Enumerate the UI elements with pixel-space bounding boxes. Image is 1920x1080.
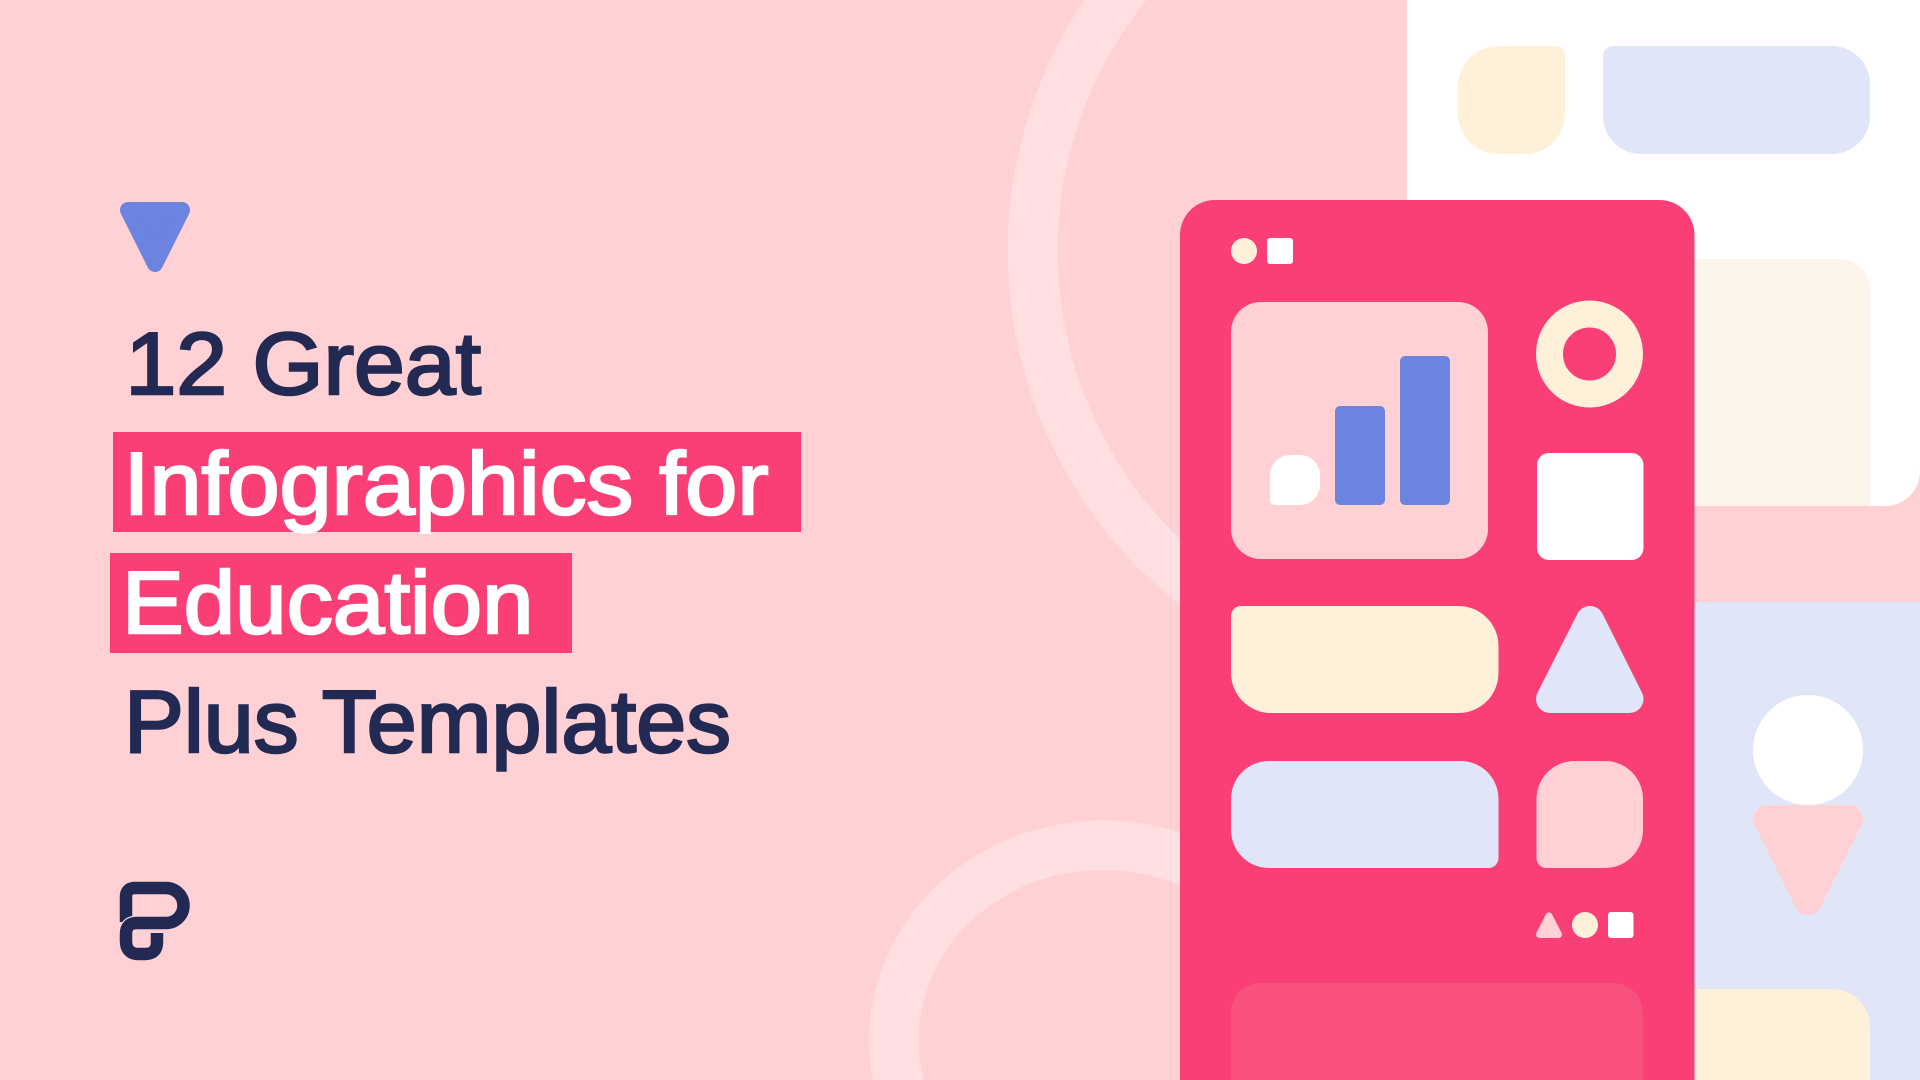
- decorative rings: [869, 0, 1200, 1080]
- icon: white square: [1537, 453, 1644, 560]
- shape: lavender rounded bar: [1603, 46, 1870, 154]
- shape: pale cream panel: [1600, 259, 1870, 506]
- block: faded pink panel: [1231, 983, 1643, 1080]
- icon: blue down triangle: [128, 210, 182, 264]
- shape: cream block: [1600, 989, 1870, 1080]
- bar: white: [1270, 455, 1320, 505]
- title line: 12 Great: 12 Great: [126, 314, 481, 413]
- bar chart card: [1231, 302, 1488, 559]
- icon: lavender triangle: [1550, 620, 1630, 699]
- highlight: Infographics for: Infographics for: [124, 434, 768, 533]
- icon: window dots: [1231, 238, 1293, 264]
- bar: blue medium: [1335, 406, 1385, 505]
- title line: Plus Templates: Plus Templates: [124, 672, 731, 771]
- panel: white backdrop: [1407, 0, 1920, 506]
- icon: logo: [126, 888, 184, 954]
- icon: small shapes row: [1540, 912, 1634, 938]
- shape: white circle: [1753, 695, 1863, 805]
- icon: cream ring: [1550, 314, 1630, 394]
- shape: cream rounded block: [1458, 46, 1565, 154]
- bar: blue tall: [1400, 356, 1450, 505]
- shape: pink down triangle: [1767, 819, 1849, 901]
- block: lavender bar: [1231, 761, 1498, 868]
- title: [110, 314, 801, 771]
- panel: lavender backdrop: [1600, 602, 1920, 1080]
- block: pink square: [1536, 761, 1643, 868]
- highlight: Education: Education: [122, 553, 534, 652]
- block: cream bar: [1231, 606, 1498, 713]
- panel: pink device card: [1180, 200, 1694, 1080]
